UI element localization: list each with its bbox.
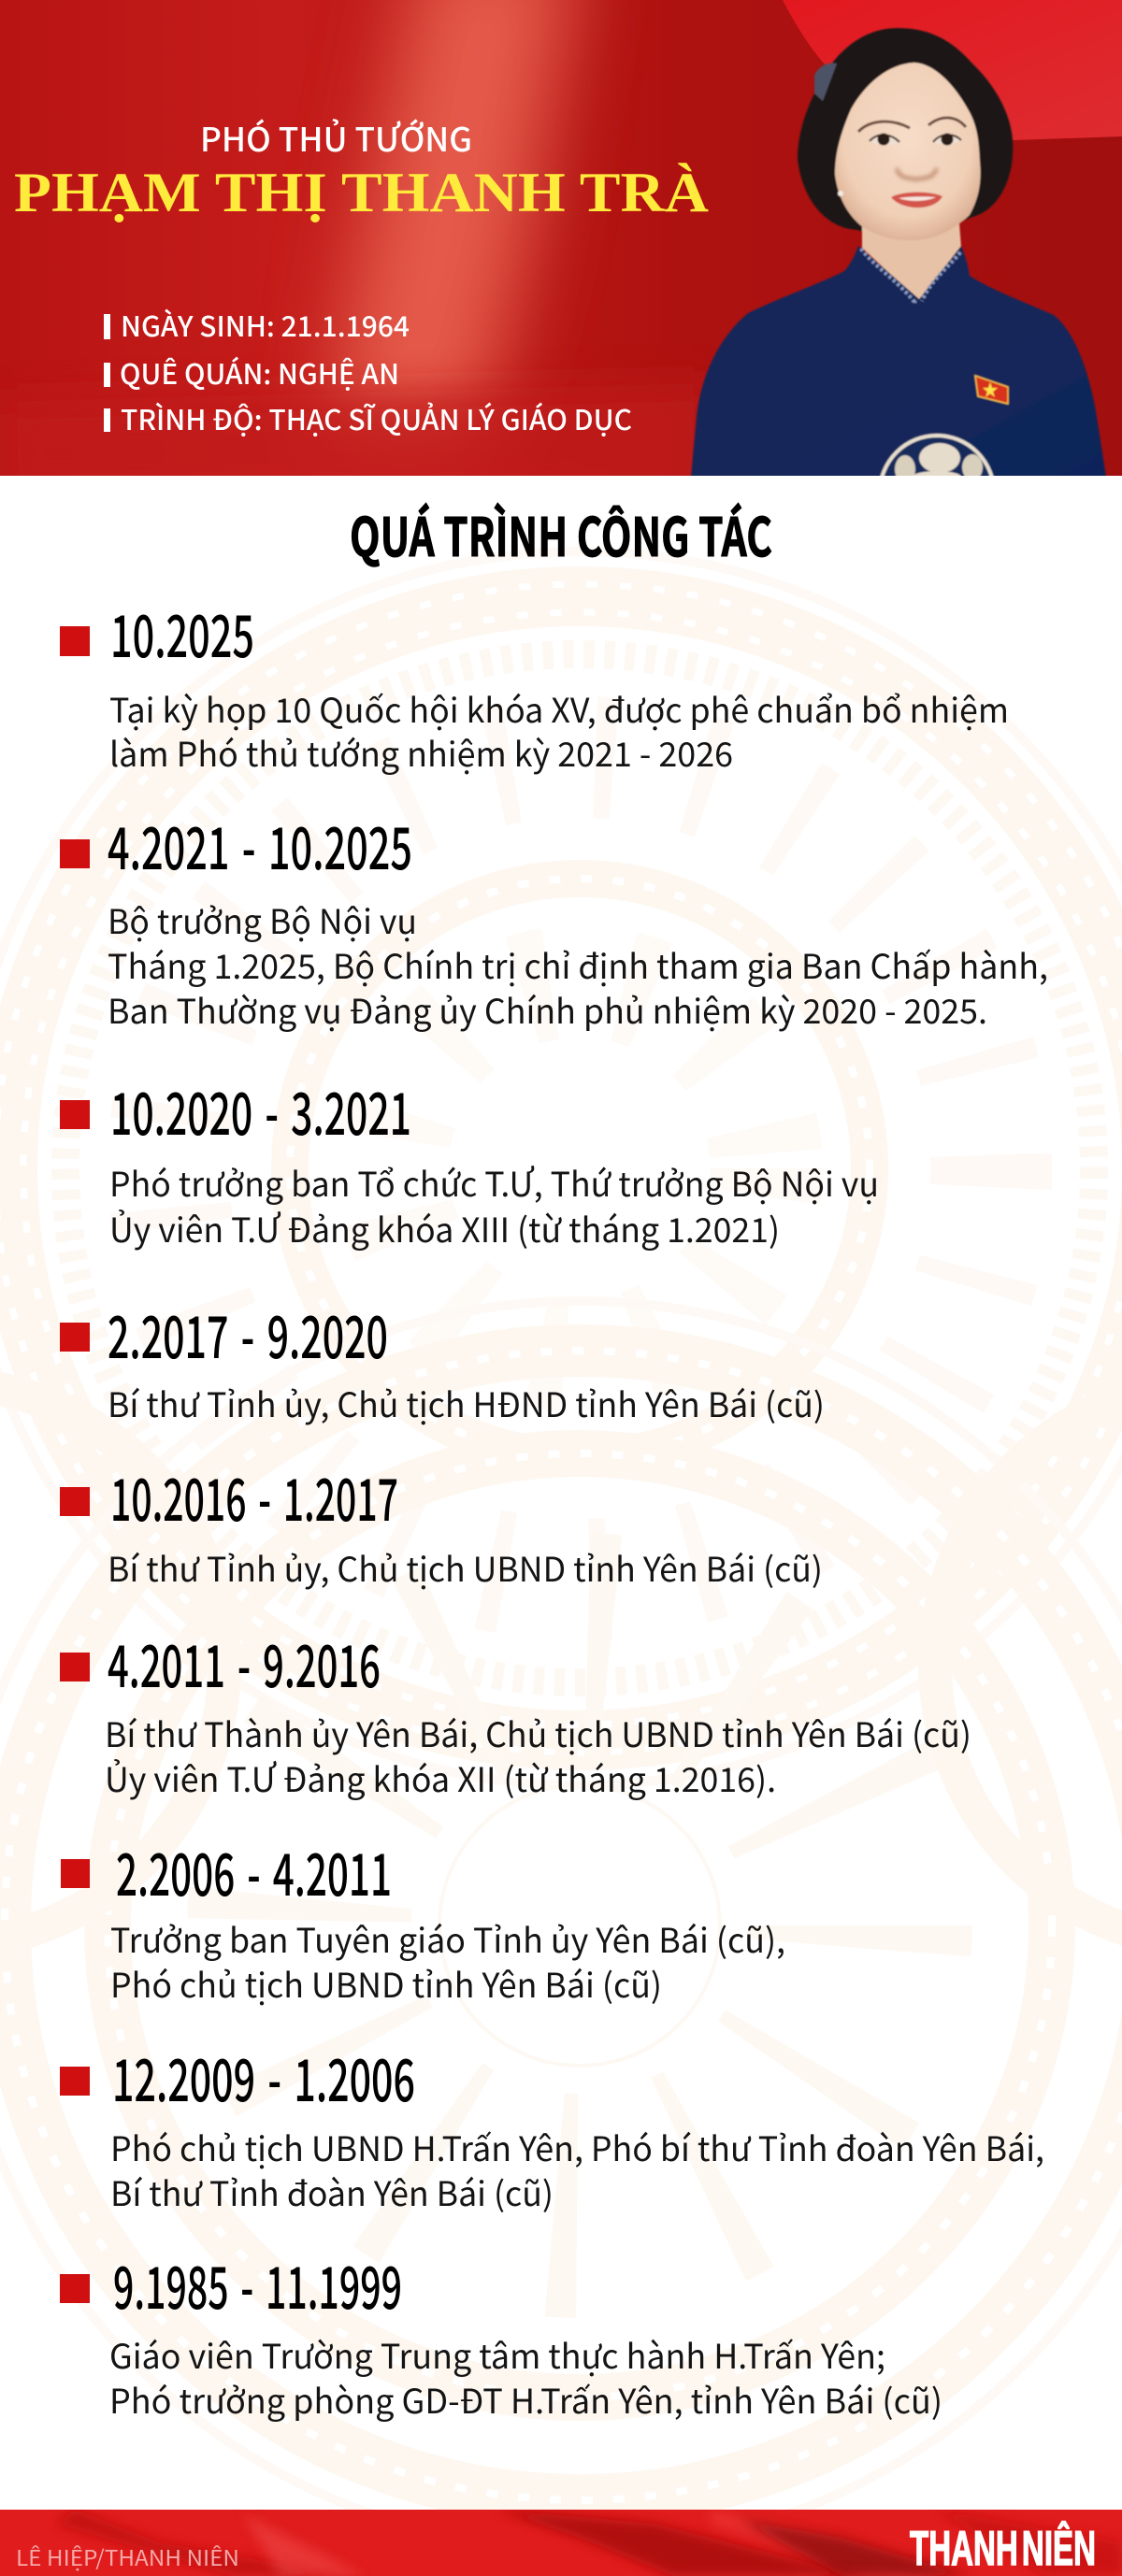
personal info <box>104 304 632 438</box>
background watermark: bronze drum pattern <box>0 551 1122 2550</box>
timeline entry 10.2025 <box>60 590 1009 777</box>
portrait photo illustration <box>690 27 1107 476</box>
eyebrows <box>858 122 910 132</box>
timeline entry 4.2021 - 10.2025: Tháng 1.2025, Bộ Chính trị chỉ định tham gia Ban Chấp hành, <box>108 940 1048 989</box>
timeline entry 4.2011 - 9.2016 <box>60 1620 971 1802</box>
timeline entry 4.2011 - 9.2016: Ủy viên T.Ư Đảng khóa XII (từ tháng 1.2016). <box>105 1753 776 1802</box>
section heading: QUÁ TRÌNH CÔNG TÁC <box>350 495 772 572</box>
timeline entry 10.2020 - 3.2021: Ủy viên T.Ư Đảng khóa XIII (từ tháng 1.2021) <box>109 1204 780 1252</box>
timeline entry 10.2020 - 3.2021 <box>60 1067 879 1252</box>
ao dai dress <box>691 246 1106 477</box>
embroidered medallion <box>879 432 995 476</box>
timeline entry 4.2011 - 9.2016: Bí thư Thành ủy Yên Bái, Chủ tịch UBND tỉnh Yên Bái (cũ) <box>105 1709 971 1757</box>
timeline entry 9.1985 - 11.1999: 9.1985 - 11.1999 <box>113 2241 402 2326</box>
footer banner <box>0 2510 1122 2576</box>
timeline entry 10.2016 - 1.2017: 10.2016 - 1.2017 <box>110 1453 398 1538</box>
timeline entry 12.2009 - 1.2006: 12.2009 - 1.2006 <box>112 2034 415 2118</box>
timeline entry 4.2011 - 9.2016: 4.2011 - 9.2016 <box>108 1620 381 1704</box>
left eye <box>870 133 899 146</box>
collar trim <box>861 249 960 303</box>
timeline entry 2.2017 - 9.2020 <box>60 1291 825 1427</box>
mouth <box>891 193 942 208</box>
timeline entry 2.2006 - 4.2011: 2.2006 - 4.2011 <box>116 1828 392 1912</box>
face <box>835 63 981 240</box>
timeline entry 12.2009 - 1.2006: Phó chủ tịch UBND H.Trấn Yên, Phó bí thư Tỉnh đoàn Yên Bái, <box>110 2123 1044 2171</box>
neck <box>860 222 962 300</box>
header banner <box>0 0 1122 476</box>
timeline entry 9.1985 - 11.1999: Giáo viên Trường Trung tâm thực hành H.Trấn Yên; <box>109 2330 885 2379</box>
timeline entry 2.2006 - 4.2011 <box>61 1828 785 2008</box>
timeline entry 10.2025: Tại kỳ họp 10 Quốc hội khóa XV, được phê chuẩn bổ nhiệm <box>109 684 1009 733</box>
timeline entry 2.2006 - 4.2011: Trưởng ban Tuyên giáo Tỉnh ủy Yên Bái (cũ), <box>110 1914 785 1963</box>
role line: PHÓ THỦ TƯỚNG <box>200 114 472 162</box>
footer credit: LÊ HIỆP/THANH NIÊN <box>16 2540 239 2572</box>
name: PHẠM THỊ THANH TRÀ <box>14 162 709 223</box>
timeline entry 9.1985 - 11.1999 <box>60 2241 942 2424</box>
timeline entry 4.2021 - 10.2025 <box>60 802 1048 1034</box>
timeline entry 10.2025: 10.2025 <box>110 590 254 674</box>
timeline entry 10.2020 - 3.2021: 10.2020 - 3.2021 <box>110 1067 411 1152</box>
header title <box>14 114 709 223</box>
birth date: NGÀY SINH: 21.1.1964 <box>121 304 410 345</box>
education: TRÌNH ĐỘ: THẠC SĨ QUẢN LÝ GIÁO DỤC <box>121 397 632 438</box>
timeline entry 10.2020 - 3.2021: Phó trưởng ban Tổ chức T.Ư, Thứ trưởng Bộ Nội vụ <box>109 1158 879 1207</box>
timeline entry 2.2006 - 4.2011: Phó chủ tịch UBND tỉnh Yên Bái (cũ) <box>110 1959 662 2008</box>
timeline entry 10.2016 - 1.2017: Bí thư Tỉnh ủy, Chủ tịch UBND tỉnh Yên Bái (cũ) <box>108 1543 823 1592</box>
timeline entry 2.2017 - 9.2020: 2.2017 - 9.2020 <box>108 1291 388 1375</box>
timeline entry 2.2017 - 9.2020: Bí thư Tỉnh ủy, Chủ tịch HĐND tỉnh Yên Bái (cũ) <box>108 1379 825 1427</box>
timeline entry 4.2021 - 10.2025: Bộ trưởng Bộ Nội vụ <box>108 895 417 944</box>
hometown: QUÊ QUÁN: NGHỆ AN <box>120 351 399 393</box>
earring <box>838 191 843 196</box>
timeline entry 12.2009 - 1.2006: Bí thư Tỉnh đoàn Yên Bái (cũ) <box>110 2168 554 2216</box>
flag pin <box>975 376 1008 404</box>
timeline entry 9.1985 - 11.1999: Phó trưởng phòng GD-ĐT H.Trấn Yên, tỉnh Yên Bái (cũ) <box>109 2375 942 2424</box>
nose <box>897 168 937 179</box>
timeline entry 10.2016 - 1.2017 <box>60 1453 823 1592</box>
timeline entry 4.2021 - 10.2025: Ban Thường vụ Đảng ủy Chính phủ nhiệm kỳ 2020 - 2025. <box>108 985 987 1034</box>
right eye <box>933 133 961 146</box>
timeline entry 4.2021 - 10.2025: 4.2021 - 10.2025 <box>108 802 412 886</box>
timeline entry 12.2009 - 1.2006 <box>60 2034 1044 2216</box>
timeline entry 10.2025: làm Phó thủ tướng nhiệm kỳ 2021 - 2026 <box>109 728 733 777</box>
hair <box>798 28 1013 236</box>
